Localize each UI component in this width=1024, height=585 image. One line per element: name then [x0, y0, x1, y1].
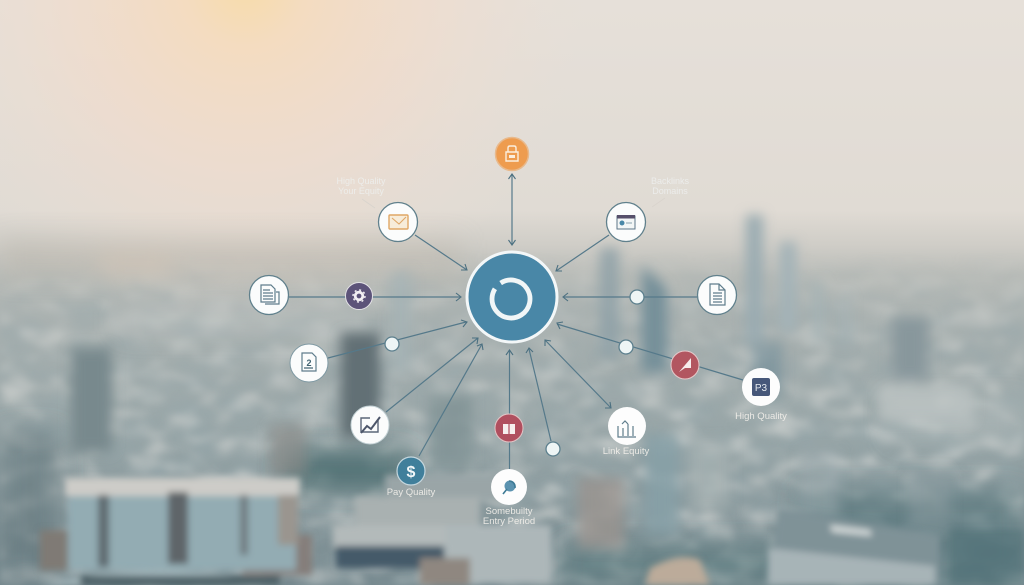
node: red feather: [671, 351, 699, 379]
arrow: bars node to hub: [545, 340, 611, 408]
arrow: chart to hub: [386, 338, 478, 412]
label: search node: Entry Period: [483, 516, 535, 527]
central hub: [467, 252, 557, 342]
arrow: doc z to hub: [328, 320, 467, 358]
node: search: [491, 469, 527, 505]
arrow: envelope to hub: [415, 235, 467, 270]
label: top left: High Quality: [336, 176, 386, 186]
node: P3: P3: [755, 383, 768, 394]
label: pay quality: Pay Quality: [387, 487, 436, 498]
node: browser card: [606, 202, 646, 242]
node: chart: [351, 406, 389, 444]
node: red gift: [495, 414, 523, 442]
node: numbered document: [290, 344, 328, 382]
label: top left: [336, 176, 386, 196]
label: search node: [483, 506, 535, 527]
arrow: dollar to hub: [419, 344, 483, 456]
arrow: browser to hub: [556, 235, 609, 271]
background building: centre low blocks: [333, 475, 551, 585]
background building: left glass block: [40, 478, 312, 585]
node: small circle left: [385, 337, 399, 351]
label: link equity: Link Equity: [603, 446, 649, 457]
connector lines and arrows: [289, 174, 743, 469]
hub ring: [485, 273, 537, 325]
background building: right rooftop: [645, 508, 1024, 585]
node: envelope: [378, 202, 418, 242]
arrow: right doc to hub: [563, 293, 697, 301]
node: dollar: $: [407, 464, 416, 481]
node: numbered document: 2: [306, 358, 312, 368]
diagram: [250, 138, 787, 527]
node: dollar: [397, 457, 425, 485]
node: P3: [742, 368, 780, 406]
node: right document: [698, 276, 736, 314]
arrow: P3 to hub: [557, 322, 743, 380]
label: search node: Somebuilty: [486, 506, 533, 517]
node: bars: [608, 407, 646, 445]
leader: top right label: [652, 198, 665, 207]
node: small circle bottom: [546, 442, 560, 456]
node: orange lock: [496, 138, 528, 170]
label: top right: [651, 176, 690, 196]
node: small circle right: [630, 290, 644, 304]
arrow: bars node head: [605, 402, 611, 408]
node: left document: [250, 276, 288, 314]
node: small circle right lower: [619, 340, 633, 354]
arrow: search to hub: [506, 350, 513, 469]
arrow: left doc to hub: [289, 293, 461, 301]
leader: top left label: [362, 199, 375, 208]
node: purple gear: [346, 282, 372, 310]
label: top right: Backlinks: [651, 176, 690, 186]
label: top right: Domains: [652, 186, 688, 196]
label: top left: Your Equity: [338, 186, 384, 196]
arrow: small node to hub: [526, 348, 551, 441]
label: high quality: High Quality: [735, 411, 787, 422]
arrow: top orange to hub: [508, 174, 516, 245]
